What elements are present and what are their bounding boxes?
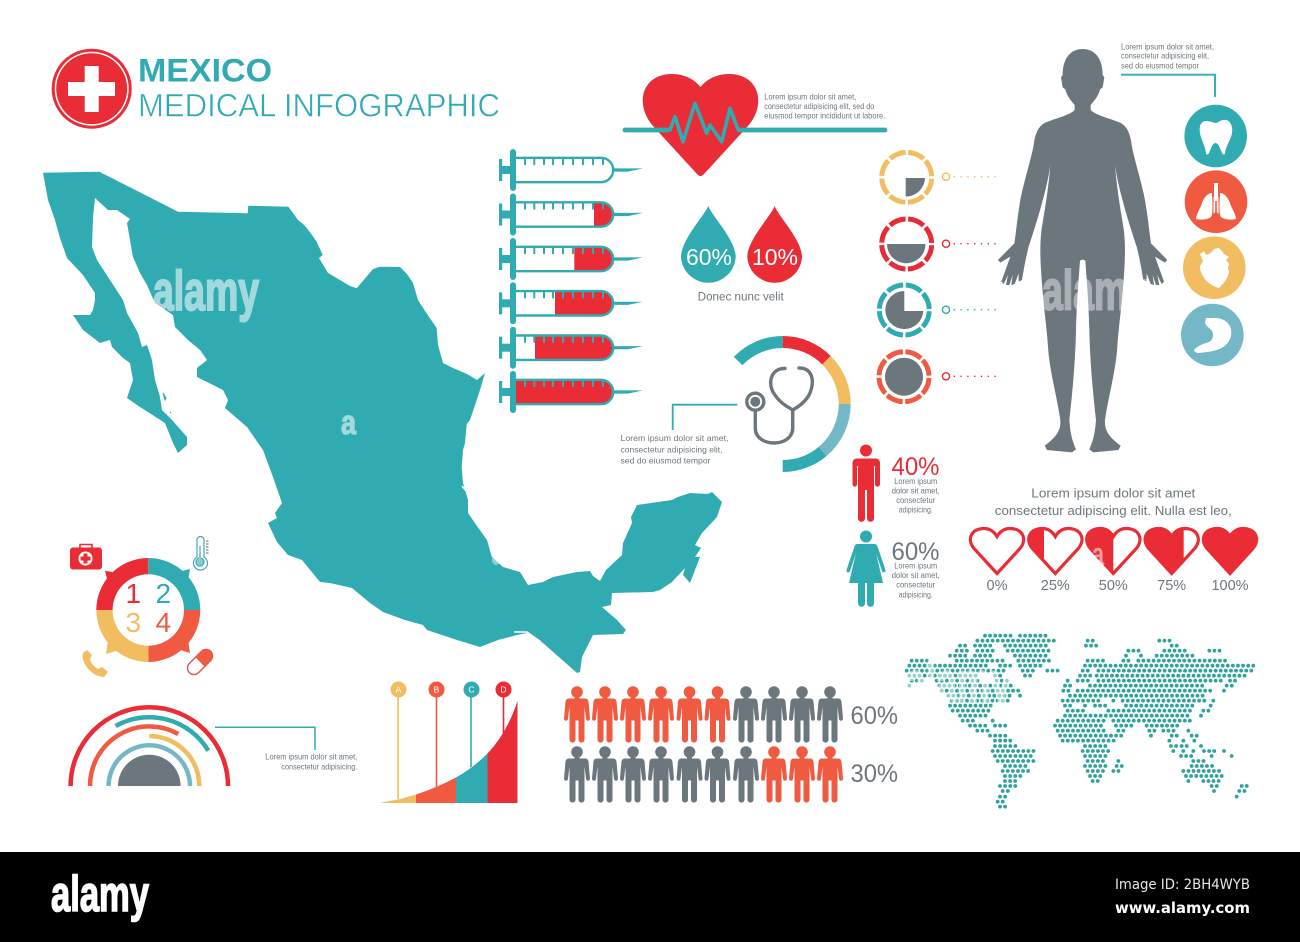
icon: stethoscope: [747, 368, 812, 443]
title: MEDICAL INFOGRAPHIC: [138, 88, 500, 124]
stethoscope donut: [738, 342, 845, 466]
woman stat: 60%: [892, 538, 940, 566]
map of Mexico: [43, 172, 722, 673]
people row 60%: 60%: [850, 702, 898, 730]
woman stat: dolor sit amet,: [892, 570, 940, 580]
map of Mexico: alamy: [153, 259, 259, 322]
heart rating 100%: 100%: [1211, 578, 1249, 594]
arcs callout: [215, 727, 357, 771]
footer bar: www.alamy.com: [1115, 899, 1250, 917]
human body silhouette: alamy: [1042, 258, 1148, 321]
ring gauge: half: [882, 219, 998, 269]
icon: lungs: [1185, 170, 1247, 233]
man stat: 40%: [892, 453, 940, 481]
icon: man: [852, 444, 880, 522]
hearts heading: consectetur adipiscing elit. Nulla est leo,: [995, 504, 1232, 518]
woman stat: consectetur: [896, 580, 935, 590]
hearts heading: Lorem ipsum dolor sit amet: [1031, 486, 1196, 500]
stethoscope callout: Lorem ipsum dolor sit amet,: [620, 433, 728, 443]
growth curve chart: B: [434, 684, 440, 694]
icon: medical kit: [70, 544, 102, 570]
title: [138, 52, 500, 124]
numbered ring: 1: [126, 578, 141, 609]
heart rating 50%: a: [1092, 536, 1104, 572]
heart rating 0%: 0%: [987, 578, 1008, 594]
people row 30%: [564, 746, 898, 802]
heart rating 75%: [1142, 528, 1198, 594]
heart rating 0%: [970, 528, 1024, 594]
growth curve chart: A: [396, 684, 402, 694]
dotted world map: [905, 636, 1258, 807]
organs callout text: Lorem ipsum dolor sit amet,: [1121, 41, 1214, 51]
heart caption: eiusmod tempor incididunt ut labore.: [764, 111, 885, 121]
icon: woman: [846, 530, 886, 607]
woman stat: adipisicing.: [899, 589, 933, 599]
drops caption: Donec nunc velit: [698, 292, 785, 304]
dotted world map: alamy: [905, 650, 1011, 713]
woman stat: [892, 538, 940, 599]
drop 60%: [681, 206, 736, 283]
woman stat: Lorem ipsum: [894, 561, 937, 571]
icon: pill: [185, 647, 215, 677]
ring gauge: full: [879, 352, 998, 402]
syringe 1 empty: [499, 149, 643, 191]
numbered ring: 3: [126, 607, 141, 638]
icon: thermometer: [194, 536, 208, 570]
icon: stomach: [1181, 304, 1244, 366]
syringe 4: [499, 282, 643, 324]
man stat: consectetur: [896, 495, 935, 505]
map of Mexico: a: [341, 404, 357, 442]
icon: heart organ: [1183, 236, 1246, 299]
title: MEXICO: [138, 52, 272, 88]
stethoscope callout: sed do eiusmod tempor: [620, 455, 711, 465]
man stat: Lorem ipsum: [894, 476, 937, 486]
syringe 6 full: [499, 371, 643, 413]
stethoscope callout: consectetur adipisicing elit,: [620, 444, 722, 454]
man stat: [892, 453, 940, 515]
drop 10%: 10%: [752, 244, 798, 270]
numbered ring: 2: [156, 578, 171, 609]
organs callout text: consectetur adipisicing elit,: [1121, 51, 1209, 61]
syringe 5: [499, 327, 643, 369]
heart rating 25%: [1025, 528, 1082, 594]
organs callout text: sed do eiusmod tempor: [1121, 61, 1199, 71]
ring gauge: three quarters: [879, 285, 998, 335]
heart rating 50%: [1083, 528, 1140, 594]
logo: medical cross badge: [52, 49, 132, 129]
syringes chart: [499, 149, 643, 413]
drop 10%: [747, 206, 802, 283]
ring gauge: quarter: [882, 152, 998, 202]
man stat: adipisicing.: [899, 505, 933, 515]
footer bar: alamy: [51, 866, 149, 922]
heart caption: Lorem ipsum dolor sit amet,: [764, 91, 856, 101]
syringe 2: [499, 194, 643, 236]
numbered ring: [96, 558, 200, 662]
growth curve chart: [380, 682, 518, 803]
heart rating 25%: 25%: [1041, 578, 1070, 594]
arcs callout: consectetur adipisicing.: [281, 761, 357, 771]
numbered ring: 4: [156, 607, 171, 638]
drop 60%: 60%: [686, 244, 732, 270]
growth curve chart: D: [500, 684, 507, 694]
heart caption: [764, 91, 885, 121]
footer bar: Image ID: 2BH4WYB: [1115, 877, 1250, 893]
heart with pulse line: [625, 74, 885, 176]
hearts heading: [995, 486, 1232, 518]
heart rating 100%: [1203, 528, 1257, 594]
icon: phone: [83, 650, 108, 677]
heart rating 75%: 75%: [1157, 578, 1186, 594]
stethoscope callout: [620, 405, 737, 465]
organs callout text: [1121, 41, 1215, 97]
heart rating 50%: 50%: [1099, 578, 1128, 594]
people row 30%: 30%: [850, 760, 898, 788]
man stat: dolor sit amet,: [892, 485, 940, 495]
syringe 3: [499, 238, 643, 280]
growth curve chart: C: [468, 684, 475, 694]
human body silhouette: [998, 49, 1167, 452]
people row 60%: [564, 686, 898, 742]
concentric arcs chart: [71, 707, 228, 786]
icon: tooth: [1184, 105, 1247, 167]
footer bar: [0, 852, 1300, 942]
arcs callout: Lorem ipsum dolor sit amet,: [265, 751, 357, 761]
heart caption: consectetur adipisicing elit, sed do: [764, 101, 875, 111]
